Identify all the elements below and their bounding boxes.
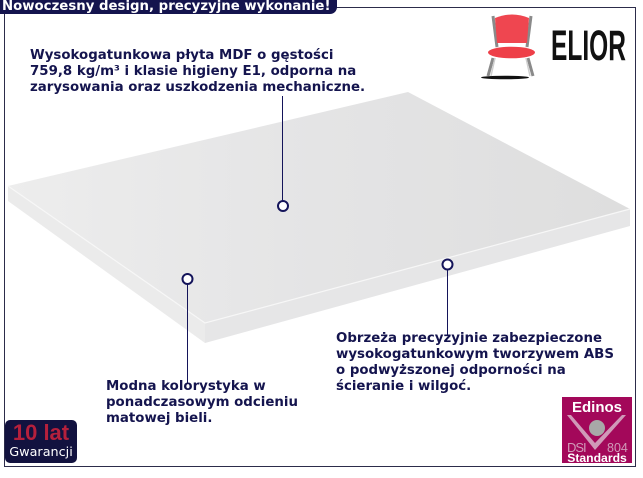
text: MDF board: zarysowania oraz uszkodzenia mechaniczne. [30,80,365,95]
icon: check mark and dot [567,415,626,450]
text: colour: matowej bieli. [106,411,212,426]
marker: colour [182,274,192,384]
text: MDF board: 759,8 kg/m³ i klasie higieny E1, odporna na [30,64,356,79]
text: MDF board: Wysokogatunkowa płyta MDF o gęstości [30,48,333,63]
logo: Elior [481,14,626,80]
text: MDF board [30,48,365,95]
text: colour: ponadczasowym odcieniu [106,395,298,410]
badge: 10 year warranty [5,420,77,463]
marker: edge [442,260,452,336]
wordmark: ELIOR [551,22,626,70]
badge: 10 year warranty: 10 lat [13,420,69,445]
text: colour: Modna kolorystyka w [106,379,266,394]
badge: 10 year warranty: Gwarancji [9,445,73,460]
text: colour [106,379,298,426]
icon: red chair [481,14,535,80]
text: edges: o podwyższonej odporności na [336,363,566,378]
text: edges: ścieranie i wilgoć. [336,379,471,394]
text: edges: wysokogatunkowym tworzywem ABS [336,347,614,362]
badge: Edinos standards: 804 [607,441,628,455]
text: edges: Obrzeża precyzyjnie zabezpieczone [336,331,602,346]
badge: Edinos standards: DSI [567,440,586,455]
marker: surface [278,96,288,211]
badge: Edinos standards [562,397,632,463]
text: edges [336,331,614,394]
badge: Edinos standards: Edinos [572,399,622,416]
